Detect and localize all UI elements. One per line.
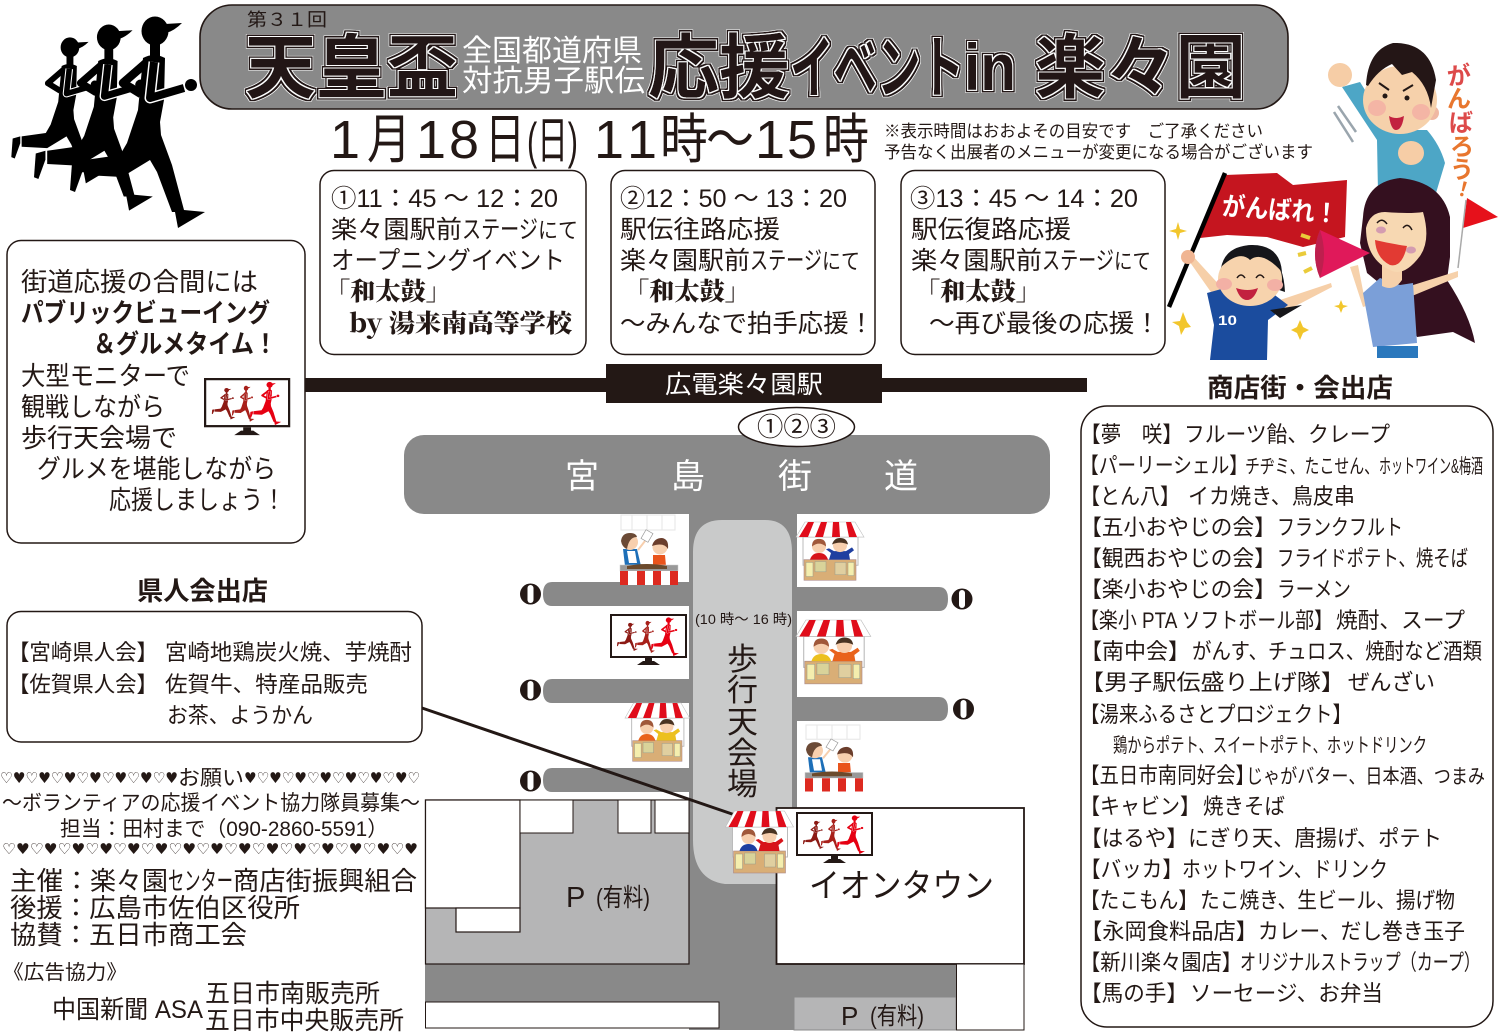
vendor 12: 【キャビン】 [1080,794,1200,819]
panel: schedule 1: ①11：45 ～ 12：20 [331,185,558,213]
map: pedestrian zone: 会 [727,736,758,771]
vendor 9: 【男子駅伝盛り上げ隊】 [1080,670,1345,695]
icon: monitor in notice [205,379,289,435]
panel: public viewing notice: パブリックビューイング [21,298,270,328]
panel: schedule 2: ②12：50 ～ 13：20 [620,185,847,213]
vendor 1: フルーツ飴、クレープ [1184,422,1390,447]
panel: schedule 3: 駅伝復路応援 [911,216,1071,244]
map: side streets [543,582,948,792]
stall: top right [796,522,864,580]
panel: schedule 1: オープニングイベント [331,247,565,275]
event date and time: (日) [527,113,578,169]
event date and time: 月 [367,110,411,170]
subtitle line 1: 全国都道府県 [462,35,642,68]
organizers: 主催： [10,866,90,896]
panel: public viewing notice [7,240,305,543]
illustration: child with jersey: 10 [1218,312,1237,328]
panel: schedule 1: ステージ [462,216,538,244]
panel: public viewing notice: 大型モニターで [21,361,190,391]
station exit ellipse [738,408,854,446]
vendor 4: 【五小おやじの会】 [1080,515,1276,540]
vendor 12: 焼きそば [1203,794,1285,819]
map: Miyajima Kaido road: 宮 [565,458,599,496]
cheer text: ganbarou: ん [1447,86,1471,113]
map: road network [425,514,956,1030]
map: Miyajima Kaido road [404,435,1050,514]
vendor 3: イカ焼き、鳥皮串 [1188,484,1355,509]
vendor 17 [1080,950,1480,975]
volunteer request: ♡♥♡♥♡♥♡♥♡♥♡♥♡♥♡♥♡♥♡♥♡♥♡♥♡♥♡♥♡♥ [2,840,418,858]
vendor 14: ホットワイン、ドリンク [1182,857,1388,882]
panel: prefectural stalls [7,612,422,742]
vendor 5: 【観西おやじの会】 [1080,546,1276,571]
vendor 13: にぎり天、唐揚げ、ポテト [1188,826,1442,851]
event date and time: 18 [416,110,479,170]
vendor 7: 焼酎、スープ [1336,608,1465,633]
panel: schedule 3: 楽々園駅前 [911,247,1042,275]
panel: public viewing notice: 歩行天会場で [21,423,177,453]
panel: public viewing notice: 街道応援の合間には [21,267,258,297]
panel: schedule 3: 「和太鼓」 [915,272,1041,308]
panel: schedule 1: by 湯来南高等学校 [349,304,574,340]
station bar [305,364,1087,403]
vendor 16: 【永岡食料品店】 [1080,919,1258,944]
illustration: stars [1169,222,1348,340]
advertising cooperation [3,961,404,1034]
note about times: ※表示時間はおおよその目安です ご了承ください [884,122,1263,141]
panel: prefectural stalls: 【宮崎県人会】 [8,640,158,665]
vendor 15 [1080,888,1455,913]
subtitle line 2: 対抗男子駅伝 [462,65,645,98]
panel: public viewing notice: 観戦しながら [21,392,165,422]
map: Aeon Town block: イオンタウン [809,867,994,904]
cheer text: ganbarou: が [1446,61,1473,91]
vendor 2: 【パーリーシェル】 [1080,453,1248,478]
map: lower blocks: (有料) [870,1003,924,1030]
heading: shopping street stalls: 商店街・会出店 [1207,373,1393,403]
panel: public viewing notice: ＆グルメタイム！ [93,329,277,359]
illustration: red flag: がんばれ！ [1221,191,1339,229]
map: pedestrian zone: 場 [727,767,758,802]
vendor 18 [1080,981,1383,1006]
vendor 13 [1080,826,1442,851]
illustration: red flag [1169,173,1347,307]
event date and time: 11 [594,110,657,170]
station exit ellipse: ①②③ [757,412,836,442]
panel: schedule 2: 「和太鼓」 [624,272,750,308]
map: Miyajima Kaido road: 道 [884,458,918,496]
event date and time: 時 [823,110,869,170]
vendor 10: 【湯来ふるさとプロジェクト】 [1080,702,1352,727]
map: left parking block [426,800,689,964]
vendor 6: 【楽小おやじの会】 [1080,577,1276,602]
map: pedestrian zone [693,520,792,884]
organizers: センター [168,866,233,896]
vendor 11: 【五日市南同好会】 [1080,763,1255,788]
title: cheering event in Rakurakuen: イベント [790,31,964,107]
organizers: 後援：広島市佐伯区役所 [10,893,300,923]
title: cheering event in Rakurakuen: in [964,30,1016,104]
cheer text: ganbarou: う [1450,157,1474,184]
panel: schedule 2: ～みんなで拍手応援！ [620,310,874,338]
cheer text: ganbarou: ろ [1450,134,1474,161]
stall: Aeon entrance [726,811,794,873]
stall: griller lower right [805,725,863,792]
vendor 13: 【はるや】 [1080,826,1188,851]
note about times: 予告なく出展者のメニューが変更になる場合がございます [884,142,1313,162]
title banner [200,5,1288,109]
vendor 14: 【バッカ】 [1080,857,1183,882]
title: Tenno Cup: 天皇盃 [245,29,458,107]
vendor 5 [1080,546,1468,571]
vendor 2: チヂミ、たこせん、 [1245,456,1379,478]
panel: schedule 3 [901,170,1165,354]
stall: middle left [625,703,690,761]
panel: schedule 1: 「和太鼓」 [325,272,451,308]
edition label: 第３１回 [247,10,327,30]
vendor 16 [1080,919,1465,944]
event date and time: ～ [706,110,754,170]
stall: middle right [796,620,871,684]
volunteer request: お願い [178,767,244,790]
cheer text: ganbarou: ！ [1450,177,1475,203]
panel: schedule 3: ③13：45 ～ 14：20 [910,185,1138,213]
cheer text: ganbarou: ば [1449,110,1473,137]
organizers: 楽々園 [90,866,168,896]
volunteer request: ♥♡♥♡♥♡♥♡♥♡♥♡♥♡ [244,769,420,787]
connector line [422,708,735,815]
vendor 6: ラーメン [1277,577,1351,602]
map: lower blocks: P [841,1001,858,1031]
panel: schedule 1: 楽々園駅前 [331,216,462,244]
event date and time: 日 [485,110,525,170]
organizers [10,866,417,950]
map: pedestrian zone: (10 時～ 16 時) [695,611,792,627]
vendor 7: 【楽小 PTA ソフトボール部】 [1080,608,1333,633]
illustration: child with jersey [1181,245,1332,360]
panel: prefectural stalls: 宮崎地鶏炭火焼、芋焼酎 [165,640,412,665]
panel: prefectural stalls: 佐賀牛、特産品販売 [165,672,368,697]
panel: public viewing notice: グルメを堪能しながら [37,454,276,484]
icon: monitor at Aeon [797,813,872,863]
map: Miyajima Kaido road: 島 [671,458,705,496]
vendor 4: フランクフルト [1277,515,1403,540]
map: left parking block: (有料) [596,884,650,912]
vendor 17: 【新川楽々園店】 [1080,950,1242,975]
organizers: 協賛：五日市商工会 [10,920,247,950]
vendor 12 [1080,794,1285,819]
volunteer request: ♡♥♡♥♡♥♡♥♡♥♡♥♡♥ [0,769,178,787]
vendor 1 [1080,422,1390,447]
icon: monitor on map [611,615,686,665]
panel: public viewing notice: 応援しましょう！ [109,485,285,515]
vendor 9 [1080,670,1435,695]
volunteer request: ～ボランティアの応援イベント協力隊員募集～ [2,792,420,815]
vendor 3 [1080,484,1355,509]
advertising cooperation: 《広告協力》 [3,961,127,984]
panel: schedule 1: にて [538,218,578,243]
advertising cooperation: 五日市南販売所 [205,980,380,1008]
stall: griller top left [620,515,678,585]
event date and time: 15 [755,110,817,170]
panel: schedule 3: にて [1114,249,1151,274]
vendor 18: ソーセージ、お弁当 [1190,981,1383,1006]
map: pedestrian zone: 天 [727,705,758,740]
cheer text: ganbarou [1446,61,1475,203]
vendor 8: 【南中会】 [1080,639,1190,664]
volunteer request: 担当：田村まで（090-2860-5591） [60,818,388,841]
advertising cooperation: 中国新聞 ASA [52,996,203,1024]
panel: schedule 2: 楽々園駅前 [620,247,750,275]
illustration: cheering man [1328,43,1445,193]
organizers: 商店街振興組合 [233,866,417,896]
vendor 4 [1080,515,1403,540]
vendor 15: 【たこもん】 [1080,888,1198,913]
illustration: woman with megaphone [1315,178,1475,358]
panel: prefectural stalls: お茶、ようかん [167,703,313,728]
map: lower blocks [426,964,1024,1031]
vendor 2 [1080,453,1483,478]
map: left parking block: P [566,882,585,914]
title: cheering event in Rakurakuen: 楽々園 [1035,29,1246,107]
map: train markers [520,584,974,792]
map: Aeon Town block [776,808,1024,964]
map: Miyajima Kaido road: 街 [778,458,812,496]
panel: schedule 2: ステージ [750,247,822,275]
heading: prefectural associations: 県人会出店 [137,576,268,606]
vendor 9: ぜんざい [1348,670,1435,695]
vendor 15: たこ焼き、生ビール、揚げ物 [1200,888,1455,913]
note about times [884,122,1313,162]
title: cheering event in Rakurakuen: 応援 [648,29,790,107]
vendor 3: 【とん八】 [1080,484,1180,509]
panel: schedule 3: ～再び最後の応援！ [929,310,1160,338]
vendor 1: 【夢 咲】 [1080,422,1183,447]
illustration: small red flag [1458,198,1498,268]
volunteer request [0,767,420,858]
event date and time: 1 [330,110,360,170]
panel: schedule 2 [611,170,875,354]
panel: schedule 2: 駅伝往路応援 [620,216,780,244]
vendor 16: カレー、だし巻き玉子 [1258,919,1465,944]
map: pedestrian zone: 歩 [727,642,758,677]
panel: prefectural stalls: 【佐賀県人会】 [8,672,158,697]
event date and time: 時 [660,110,708,170]
panel: schedule 2: にて [822,249,860,274]
vendor 18: 【馬の手】 [1080,981,1188,1006]
runners illustration [11,16,205,228]
panel: schedule 3: ステージ [1042,247,1114,275]
panel: schedule 1 [320,170,586,354]
event date and time [330,110,869,170]
panel: vendor list [1080,406,1493,1027]
vendor 14 [1080,857,1388,882]
station bar: 広電楽々園駅 [665,371,823,399]
vendor 8 [1080,639,1482,664]
map: pedestrian zone: 行 [727,673,758,708]
vendor 11 [1080,763,1485,788]
title: cheering event in Rakurakuen [648,29,1246,107]
